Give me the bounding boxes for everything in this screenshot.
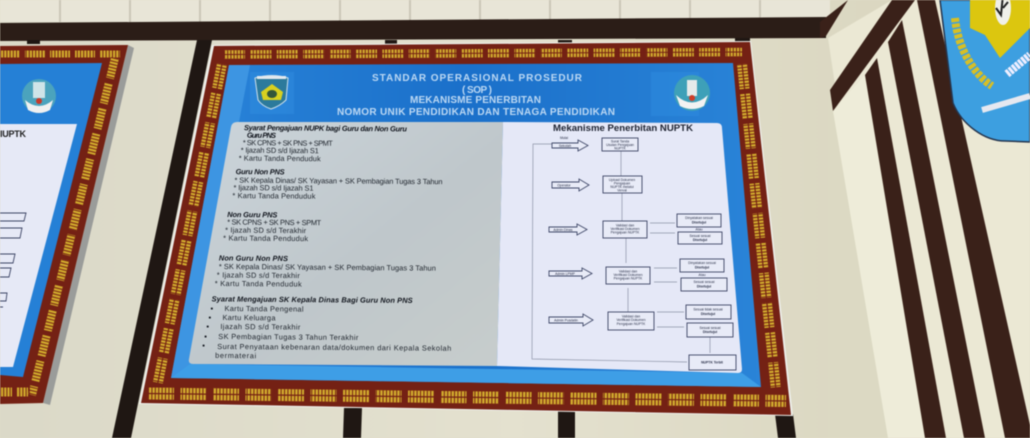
flow step 1: Surat Tanda [611,140,629,144]
flow step 1: Sekolah [559,144,571,148]
requirements text: Kartu Keluarga [222,313,276,322]
flow step 4: Atau [699,273,706,277]
flow step 4: Sesuai sesuai [693,280,715,284]
left board ornament [0,54,120,395]
flowchart connector lines [532,144,710,362]
requirements text: Syarat Pengajuan NUPK bagi Guru dan Non Guru [244,123,407,133]
requirements text: * Kartu Tanda Penduduk [232,191,316,201]
flow step 5 [549,305,733,337]
requirements text: Non Guru Non PNS [219,253,288,263]
left board white panel [0,124,77,367]
requirements text: * Kartu Tanda Penduduk [223,233,308,243]
flow step 3: Disetujui [693,238,707,242]
flow end: NUPTK terbit [689,355,736,370]
left board side edge [43,45,134,405]
requirements text: ▪ [204,332,207,341]
flow step 3 [549,214,722,244]
requirements text [202,123,453,362]
flow step 4: Disetujui [695,266,709,270]
blue field left light band [171,65,250,378]
panel: flowchart [497,122,742,373]
flow step 4: Admin LPMP [555,272,576,276]
requirements text: SK Pembagian Tugas 3 Tahun Terakhir [218,332,359,342]
requirements text: Kartu Tanda Pengenal [225,304,304,314]
left board flow boxes [0,213,26,307]
flow step 2: Pengajuan [614,182,630,186]
flow step 5: Sesuai sesuai [699,326,721,330]
requirements text: * Kartu Tanda Penduduk [215,279,302,289]
left board heading: IUPTK [0,129,26,139]
flow step 5: Validasi dan [622,314,640,318]
header title [337,73,615,118]
flow step 5: Verifikasi Dokumen [616,318,646,322]
flow step 3: Disetujui [692,220,706,224]
flow step 3: Admin Dinas [553,228,573,232]
flow step 5: Pengajuan NUPTK [617,322,646,326]
flowchart title: Mekanisme Penerbitan NUPTK [553,123,693,134]
header title: MEKANISME PENERBITAN [410,95,541,106]
flow step 5: Sesuai tidak sesuai [693,308,723,312]
flow step 5: Admin Pusdatin [554,318,578,322]
requirements text: * Kartu Tanda Penduduk [239,154,321,163]
flow step 3: Validasi dan [616,224,634,228]
requirements text: ▪ [206,322,209,331]
blue field [171,63,761,387]
requirements text: Guru PNS [247,131,276,140]
left board blue field [0,63,102,377]
right column shadow side [828,90,888,438]
flow step 2: NUPTK melalui [610,185,634,189]
flow step 5: Disetujui [703,330,717,334]
left board [0,45,134,405]
requirements text: bermaterai [215,351,257,360]
logo: regional shield [250,72,294,114]
flow step 2: Upload Dokumen [609,178,635,182]
flow step 4 [549,259,727,291]
flow step 3: Dinyatakan sesuai [685,216,713,220]
requirements text: Guru Non PNS [236,167,285,176]
flow step 1: Usulan Pengajuan [606,143,634,147]
emblem: regional shield [940,0,1030,142]
brown diagonal beams and strips [820,0,1030,438]
requirements text: Surat Penyataan kebenaran data/dokumen dari Kepala Sekolah [217,342,451,353]
left board frame [0,45,128,404]
requirements text: Non Guru PNS [227,210,277,219]
dark wooden wall strips [27,38,796,438]
flow step 1: NUPTK [614,146,626,150]
flow step 3: Verifikasi Dokumen [610,227,640,231]
blue field bottom light band [171,364,761,387]
requirements text: * Ijazah SD s/d Ijazah S1 [241,146,319,155]
header title: STANDAR OPERASIONAL PROSEDUR [372,73,583,84]
flow step 3: Pengajuan NUPTK [611,230,640,234]
dark wooden beam [0,17,826,41]
ceiling strips [0,0,830,22]
flow step 1: Mulai [560,136,568,140]
requirements text: ▪ [208,313,212,322]
requirements text: ▪ [211,304,214,313]
requirements text: Syarat Mengajuan SK Kepala Dinas Bagi Guru Non PNS [212,294,413,305]
logo: education ministry [651,72,710,116]
requirements text: * Ijazah SD s/d Ijazah S1 [233,183,314,193]
right column light panel [833,75,925,438]
requirements text: * Ijazah SD s/d Terakhir [217,270,300,280]
flow step 4: Validasi dan [619,270,637,274]
flow step 3: Sesuai sesuai [689,234,711,238]
requirements text: * SK CPNS + SK PNS + SPMT [243,138,333,148]
header title: NOMOR UNIK PENDIDIKAN DAN TENAGA PENDIDIKAN [337,107,615,118]
flow step 3: Atau [696,228,703,232]
flow step 2 [552,176,642,193]
flow step 1 [552,136,638,151]
flow end: NUPTK terbit: NUPTK Terbit [701,360,724,364]
flow step 4: Disetujui [697,284,711,288]
flow step 2: Verval [617,188,627,192]
board frame [141,42,791,415]
board outer edge [139,41,793,416]
requirements text: * SK CPNS + SK PNS + SPMT [227,218,322,227]
flow step 5: Disetujui [701,312,715,316]
flow step 4: Pengajuan NUPTK [614,276,643,280]
requirements text: Ijazah SD s/d Terakhir [220,322,301,332]
header title: ( SOP ) [462,85,492,96]
requirements text: * Ijazah SD s/d Terakhir [225,226,307,235]
flow step 4: Verifikasi Dokumen [613,273,643,277]
requirements text: ▪ [202,341,205,350]
requirements text: * SK Kepala Dinas/ SK Yayasan + SK Pembagian Tugas 3 Tahun [235,176,443,186]
requirements text: * SK Kepala Dinas/ SK Yayasan + SK Pembagian Tugas 3 Tahun [219,262,436,273]
frame ornament [148,52,786,401]
left board logo [22,79,56,113]
right white column [828,0,1030,438]
panel: requirements [189,122,503,366]
flow step 2: Operator [557,184,572,188]
main board [139,41,793,416]
flow step 4: Dinyatakan sesuai [688,261,716,265]
